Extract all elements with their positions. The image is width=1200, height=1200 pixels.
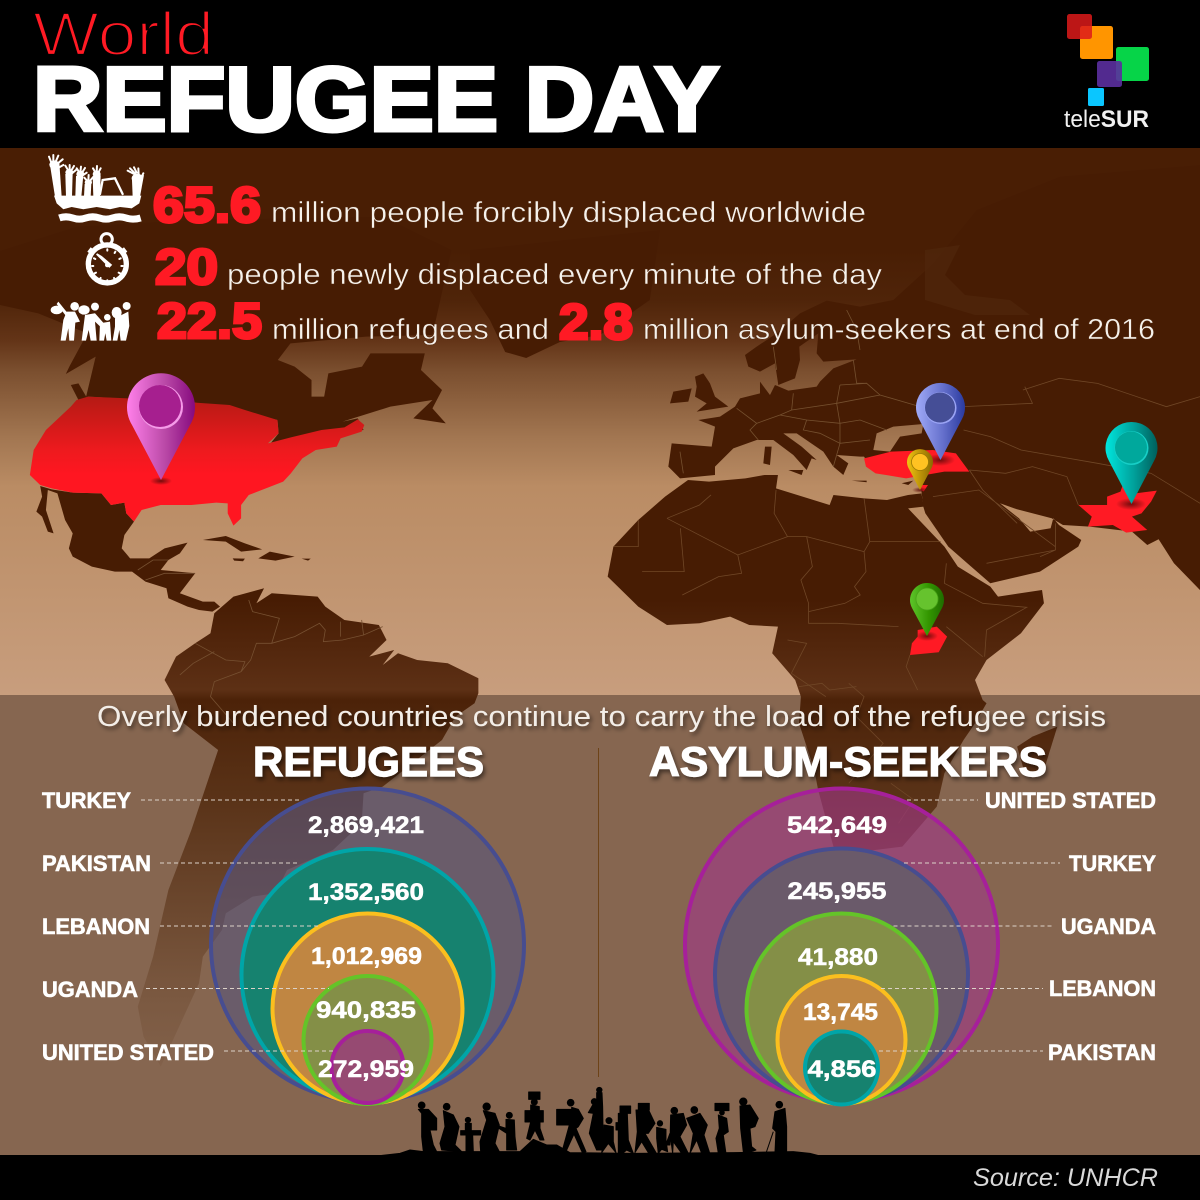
icon: stopwatch — [87, 234, 127, 283]
divider line — [598, 748, 600, 1077]
labels: asylum-seekers countries: UGANDA — [1061, 914, 1156, 939]
source credit: Source: UNHCR — [973, 1164, 1158, 1192]
labels: asylum-seekers countries — [879, 788, 1156, 1065]
values: asylum-seekers: 542,649 — [787, 812, 887, 839]
header band — [0, 0, 1200, 148]
map: Central and South America borders — [138, 560, 383, 723]
statistic: 22.5 refugees and 2.8 asylum-seekers: 22.5 — [157, 293, 262, 349]
labels: asylum-seekers countries: LEBANON — [1049, 976, 1156, 1001]
values: asylum-seekers — [787, 812, 887, 1083]
panel: lower comparison background — [0, 695, 1200, 1155]
nested circles: asylum-seekers by country — [685, 788, 998, 1104]
map pin: United States — [127, 373, 195, 485]
values: asylum-seekers: 4,856 — [808, 1056, 876, 1083]
values: asylum-seekers: 245,955 — [788, 878, 886, 905]
statistic: 65.6 million displaced: 65.6 — [153, 177, 261, 233]
values: refugees: 1,012,969 — [311, 943, 422, 970]
labels: asylum-seekers countries: TURKEY — [1069, 851, 1156, 876]
map: European borders — [680, 310, 920, 473]
background: ocean gradient — [0, 148, 1200, 700]
heading: asylum-seekers: ASYLUM-SEEKERS — [649, 738, 1047, 785]
statistic: 20 newly displaced: people newly displaced every minute of the day — [227, 259, 883, 291]
statistic: 22.5 refugees and 2.8 asylum-seekers — [51, 293, 1155, 350]
statistic: 20 newly displaced — [87, 234, 883, 295]
map pin: Lebanon — [907, 449, 933, 493]
labels: refugees countries: UNITED STATED — [42, 1040, 214, 1065]
labels: asylum-seekers countries: UNITED STATED — [985, 788, 1156, 813]
footer band — [0, 1155, 1200, 1200]
values: refugees: 940,835 — [316, 997, 416, 1024]
labels: refugees countries: TURKEY — [42, 788, 131, 813]
map pin: Turkey — [916, 383, 965, 466]
title — [33, 0, 719, 150]
highlighted countries: Turkey, Lebanon, Pakistan, Uganda — [864, 450, 1157, 655]
labels: refugees countries — [42, 788, 335, 1065]
icon: family carrying bundles — [51, 302, 131, 341]
map pin: Pakistan — [1106, 422, 1158, 510]
labels: refugees countries: LEBANON — [42, 914, 150, 939]
title: REFUGEE DAY — [33, 50, 719, 150]
values: refugees — [308, 812, 424, 1083]
logo: teleSUR: teleSUR — [1064, 106, 1149, 133]
statistic: 22.5 refugees and 2.8 asylum-seekers: million refugees and — [272, 314, 549, 346]
highlighted country: United States — [30, 397, 364, 526]
logo: teleSUR — [1064, 14, 1149, 133]
map: faint Siberian relief — [925, 245, 1030, 315]
statistic: 22.5 refugees and 2.8 asylum-seekers: million asylum-seekers at end of 2016 — [643, 314, 1155, 346]
statistic: 22.5 refugees and 2.8 asylum-seekers: 2.8 — [559, 294, 633, 350]
values: refugees: 1,352,560 — [308, 879, 424, 906]
heading: burdened countries: Overly burdened countries continue to carry the load of the refugee crisis — [97, 701, 1106, 733]
values: refugees: 272,959 — [318, 1056, 414, 1083]
labels: refugees countries: UGANDA — [42, 977, 138, 1002]
icon: boat with raised hands — [49, 155, 144, 219]
map: Americas — [0, 217, 660, 1067]
map pin: Uganda — [910, 583, 944, 641]
map: Africa — [608, 475, 1057, 853]
map: Eurasia — [668, 163, 1200, 603]
heading: refugees: REFUGEES — [253, 738, 484, 785]
map: country borders — [613, 378, 1200, 823]
statistic: 20 newly displaced: 20 — [155, 239, 218, 295]
values: asylum-seekers: 41,880 — [798, 944, 878, 971]
labels: refugees countries: PAKISTAN — [42, 851, 151, 876]
illustration: silhouettes of refugees walking — [377, 1087, 820, 1160]
title: World — [33, 0, 214, 68]
values: refugees: 2,869,421 — [308, 812, 424, 839]
nested circles: refugees by country — [211, 788, 524, 1104]
values: asylum-seekers: 13,745 — [803, 999, 878, 1026]
labels: asylum-seekers countries: PAKISTAN — [1048, 1040, 1156, 1065]
statistic: 65.6 million displaced — [49, 155, 866, 233]
panel: asylum-seekers — [649, 738, 1156, 1104]
statistic: 65.6 million displaced: million people forcibly displaced worldwide — [271, 197, 866, 229]
panel: refugees — [42, 738, 524, 1104]
